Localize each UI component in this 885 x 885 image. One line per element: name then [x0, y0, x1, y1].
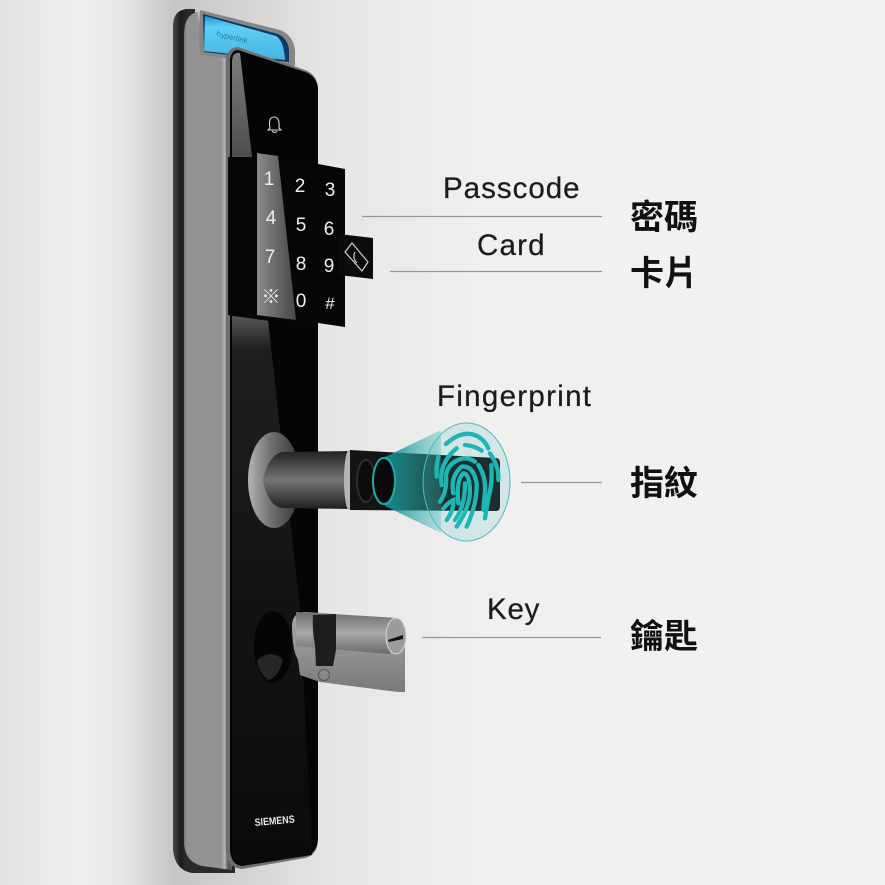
- keypad digits: 4: [266, 208, 277, 229]
- keypad digits: [261, 169, 335, 313]
- label: Key: Key: [487, 593, 540, 626]
- label: Passcode: [362, 172, 698, 237]
- label: Card: Card: [477, 229, 546, 262]
- card scan window: hyperlink: [216, 29, 250, 46]
- keypad digits: 6: [324, 219, 334, 240]
- handle: [248, 432, 500, 528]
- brand: SIEMENS: SIEMENS: [254, 814, 295, 829]
- label: Passcode: 密碼: [630, 199, 698, 237]
- keypad highlight strip: [257, 153, 296, 320]
- keypad digits: #: [325, 294, 335, 313]
- back plate: [173, 9, 235, 873]
- fingerprint: [437, 434, 498, 527]
- label: Fingerprint: 指紋: [630, 465, 698, 503]
- key cylinder: [292, 612, 406, 692]
- keypad: [228, 153, 345, 328]
- keypad digits: 3: [325, 180, 335, 201]
- keypad digits: 0: [296, 291, 306, 312]
- keypad digits: 5: [296, 215, 306, 236]
- front panel: [226, 47, 318, 869]
- scan beam: [385, 430, 441, 533]
- card scan window: [199, 10, 295, 66]
- keypad digits: 1: [264, 169, 274, 190]
- scan circle: [423, 423, 510, 541]
- label: Key: [422, 593, 698, 656]
- label: Card: 卡片: [630, 255, 698, 293]
- label: Fingerprint: [437, 380, 698, 503]
- label: Card: [390, 229, 698, 293]
- keyhole recess: [254, 611, 292, 683]
- label: Fingerprint: Fingerprint: [437, 380, 592, 413]
- label: Passcode: Passcode: [443, 172, 581, 205]
- label: Key: 鑰匙: [630, 618, 698, 656]
- smart lock body: [173, 9, 510, 873]
- keypad digits: 7: [265, 247, 275, 268]
- keypad digits: 9: [324, 256, 334, 277]
- keypad digits: 2: [295, 176, 305, 197]
- fingerprint sensor graphic: [373, 423, 510, 541]
- keypad digits: ※: [261, 287, 281, 308]
- keypad digits: 8: [296, 254, 306, 275]
- icon: card tag: [339, 234, 373, 279]
- icon: doorbell: [268, 117, 281, 132]
